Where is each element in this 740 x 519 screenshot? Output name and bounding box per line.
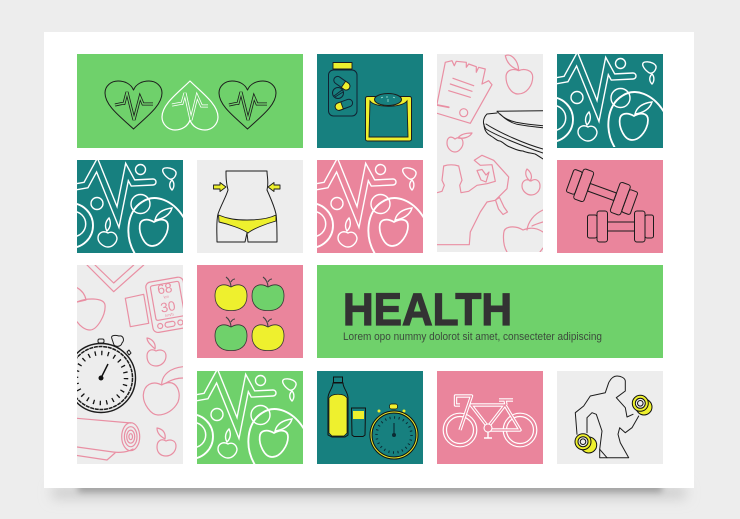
panel: bodybuilder — [557, 371, 663, 464]
icon: apple left — [77, 288, 105, 330]
icon: blood pressure monitor: km — [163, 294, 170, 300]
panel: bicycle — [437, 371, 543, 464]
panel: waist — [197, 160, 303, 253]
paper sheet — [44, 32, 694, 488]
icon: apple right — [522, 169, 540, 195]
icon: yellow apple — [215, 277, 247, 311]
panel: blood pressure, stopwatch and mat — [77, 265, 183, 464]
icon: blood pressure monitor: km/h — [165, 312, 174, 318]
title: HEALTH — [343, 284, 512, 335]
icon: inverted heart with pulse — [162, 81, 218, 130]
panel: title — [317, 265, 663, 358]
icon: yellow apple lower — [252, 317, 284, 351]
icon: stopwatch — [77, 334, 136, 414]
icon: tilted dumbbell — [565, 165, 639, 219]
icon: chevron top — [87, 265, 144, 292]
panel: hearts — [77, 54, 303, 148]
icon: blood pressure monitor: 30 — [159, 298, 177, 316]
panel: bottle and stopwatch — [317, 371, 423, 464]
panel: pills and scale — [317, 54, 423, 148]
icon: green apple lower — [215, 317, 247, 351]
icon: stopwatch yellow — [370, 404, 418, 459]
icon: bodybuilder silhouette — [575, 376, 639, 458]
icon: bicycle — [443, 396, 537, 447]
icon: dumbbell right — [632, 395, 652, 415]
icon: blood pressure monitor — [124, 276, 183, 333]
subtitle: Lorem opo nummy dolorot sit amet, consecteter adipiscing — [343, 331, 602, 343]
paper shadow core — [78, 484, 662, 492]
icon: flexed arm torso — [437, 155, 509, 245]
arrow: left — [214, 182, 226, 192]
icon: fitness glove — [437, 61, 492, 123]
icon: large apple right — [143, 367, 183, 415]
icon: yellow briefs — [218, 215, 276, 233]
icon: horizontal dumbbell — [588, 211, 654, 242]
icon: large apple bottom — [503, 210, 543, 252]
icon: blood pressure monitor: 68 — [156, 280, 173, 297]
icon: pill bottle — [328, 62, 357, 116]
arrow: right — [268, 182, 280, 192]
panel: teal pattern top right — [528, 54, 664, 148]
icon: water bottle — [328, 377, 348, 437]
paper shadow wide — [52, 486, 686, 499]
panel: glove, shoe and muscle — [437, 54, 543, 252]
icon: apple top right — [505, 55, 533, 94]
icon: glass — [352, 408, 366, 436]
panel: dumbbells — [557, 160, 663, 253]
icon: small apple lower — [157, 428, 176, 456]
icon: small apple — [447, 133, 472, 152]
icon: dumbbell left — [575, 434, 597, 453]
icon: small apple upper — [147, 338, 166, 366]
icon: heart with pulse left — [105, 81, 162, 129]
icon: waist silhouette — [217, 171, 277, 242]
icon: bathroom scale — [366, 94, 412, 141]
panel: teal pattern left — [48, 160, 184, 254]
icon: yoga mat — [77, 418, 140, 460]
panel: pink pattern — [288, 160, 424, 254]
panel: green pattern — [168, 371, 304, 465]
panel: four apples — [197, 265, 303, 358]
icon: running shoe — [483, 111, 543, 159]
icon: heart with pulse right — [219, 81, 276, 129]
icon: green apple — [252, 277, 284, 311]
